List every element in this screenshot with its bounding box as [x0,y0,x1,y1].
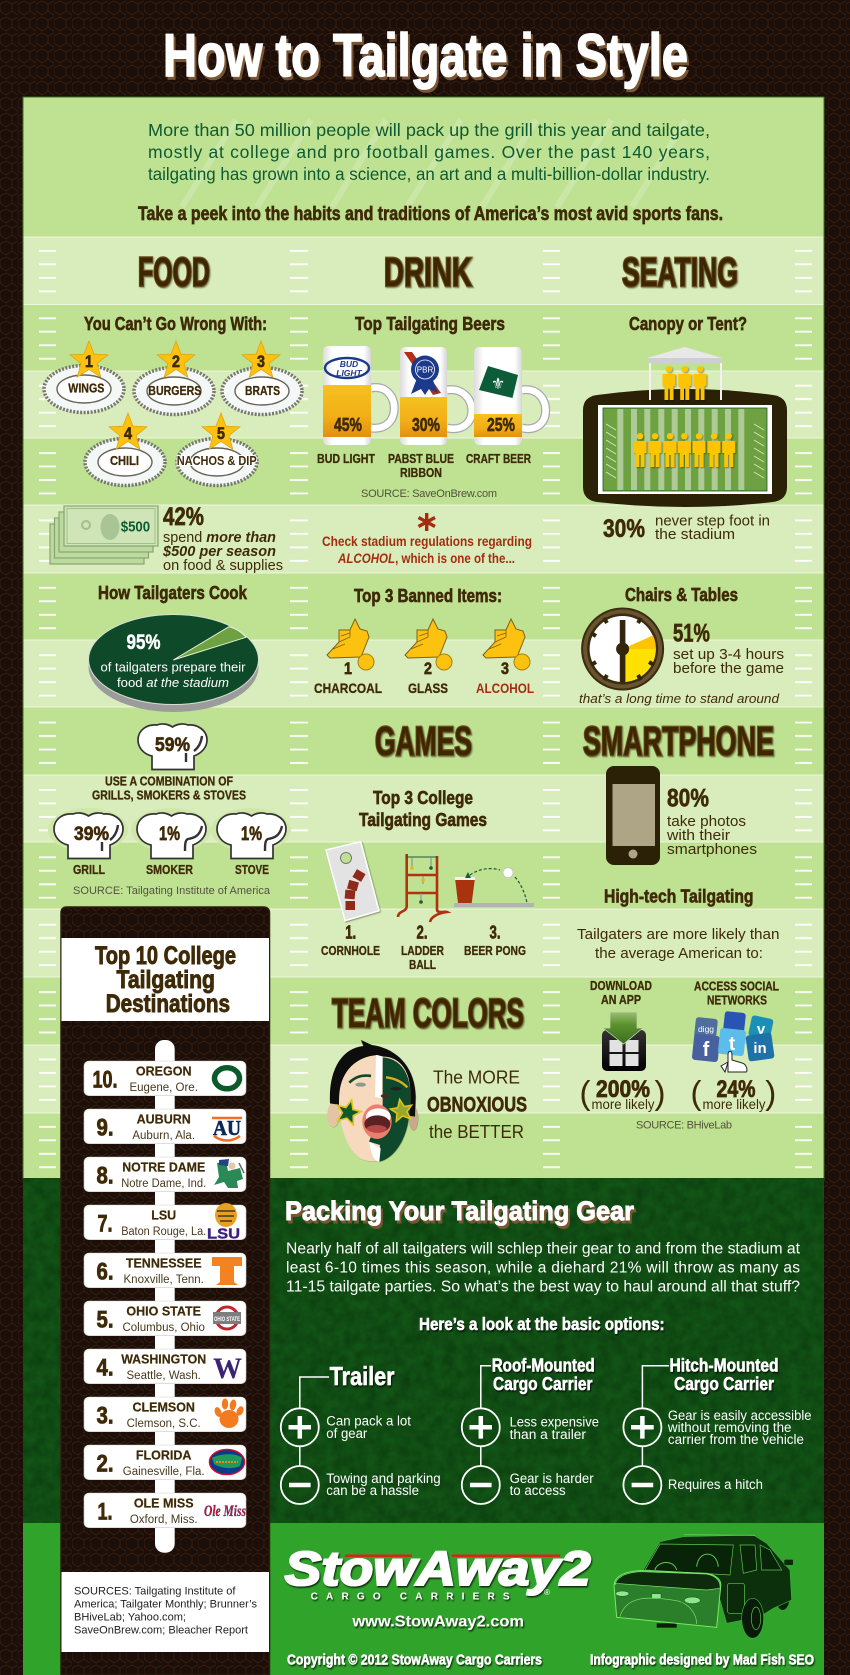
sign 6 tennessee [84,1253,246,1288]
mug 2 pabst [400,347,472,445]
mug 2 pabst: 30% [412,415,440,435]
sign 8 notre dame: NOTRE DAME [122,1161,205,1175]
option: roof-mounted cargo carrier: Roof-Mounted [492,1355,595,1376]
icons: social networks: v [757,1021,766,1038]
sign 6 tennessee: Knoxville, Tenn. [124,1274,204,1286]
item 3 alcohol: ALCOHOL [476,680,534,696]
title: How to Tailgate in Style [163,22,688,89]
sign 9 auburn [84,1109,246,1144]
subheading: Take a peek into the habits and traditions of America’s most avid sports fans. [138,204,723,225]
item 3 alcohol [476,619,534,696]
intro text: tailgating has grown into a science, an art and a multi-billion-dollar industry. [148,164,710,184]
game labels: 2. [416,922,428,942]
stat: 42 percent spend: on food & supplies [163,558,283,574]
icon: minus [462,1466,500,1504]
text: packing intro: least 6-10 times this season, while a diehard 21% will throw as many as [286,1260,800,1276]
chef hat stove: STOVE [235,862,269,877]
people in the stadium [634,433,735,467]
option: hitch-mounted cargo carrier [623,1355,812,1504]
option: trailer: of gear [326,1426,368,1441]
logo: auburn: AU [213,1116,241,1140]
logo: stowaway2 cargo carriers: StowAway2 [285,1543,591,1596]
chef hat stove: 1% [241,824,262,845]
icons: social networks: f [703,1039,710,1061]
option: hitch-mounted cargo carrier: Requires a hitch [668,1477,763,1492]
game labels [321,922,526,972]
heading: games: GAMES [375,718,472,764]
game labels: 1. [345,922,356,942]
sign 9 auburn: 9. [96,1115,114,1142]
stadium screen [583,389,787,507]
pie chart: 95 percent at the stadium: of tailgaters prepare their [100,660,246,674]
sign 5 ohio state: 5. [96,1307,114,1334]
plate 1 wings: 1 [85,352,93,371]
panel: packing gear [23,1178,824,1523]
source: beers: SOURCE: SaveOnBrew.com [361,488,497,500]
stat: access social networks [690,980,779,1112]
logo: clemson paw [213,1398,245,1428]
plate 2 burgers [134,341,214,414]
text: the more obnoxious the better: the BETTER [429,1122,524,1142]
stat: access social networks: ACCESS SOCIAL [694,980,779,994]
stat: 80 percent take photos: smartphones [667,841,757,858]
stat: 51 percent set up early: set up 3-4 hours [673,646,784,663]
sign 10 oregon: OREGON [136,1065,191,1079]
subhead: high-tech tailgating: High-tech Tailgating [604,886,754,906]
subhead: how tailgaters cook: How Tailgaters Cook [98,582,248,603]
sign 3 clemson: CLEMSON [132,1401,195,1415]
sign 1 ole miss: OLE MISS [134,1497,194,1511]
footer: copyright: Copyright © 2012 StowAway Cargo Carriers [287,1651,542,1668]
option: trailer: can be a hassle [326,1483,419,1498]
sign 7 lsu: LSU [151,1209,176,1223]
subhead: top 3 college tailgating games [359,787,487,830]
heading: team colors: TEAM COLORS [332,990,524,1036]
banned items [314,619,534,696]
stat: 51 percent set up early: before the game [673,660,784,677]
illustration: painted fan face [327,1040,418,1162]
chef hat smoker: 1% [159,824,180,845]
sign 5 ohio state: OHIO STATE [126,1305,201,1319]
stat: 51 percent set up early: that’s a long time to stand around [579,691,780,706]
option: hitch-mounted cargo carrier: Gear is easily accessible [668,1408,812,1423]
panel header: Destinations [106,990,230,1018]
text: tailgaters more likely: the average American to: [595,945,763,962]
mug 3 craft beer [474,347,546,445]
stat: 30 percent never step foot: never step foot in [655,512,770,530]
stat: 42 percent spend: $500 per season [162,544,276,560]
logo: florida gator [210,1450,244,1474]
plate 5 nachos and dip: 5 [217,424,225,443]
plate 5 nachos and dip [177,413,257,486]
sign 3 clemson: 3. [96,1403,114,1430]
mug 1 bud light: BUD [340,359,358,369]
icon: stack of cash [50,506,158,564]
plate 4 chili [85,413,165,486]
stat: 30 percent never step foot: the stadium [655,526,735,543]
stat: download an app [580,979,666,1112]
stat: access social networks: ) [765,1074,776,1111]
sources box: SOURCES: Tailgating Institute of [74,1585,236,1597]
intro text: mostly at college and pro football games. Over the past 140 years, [148,142,710,162]
logo: notre dame [214,1159,244,1188]
text: use a combination: GRILLS, SMOKERS & STOVES [92,788,246,802]
sign 4 washington [84,1349,246,1385]
sign 7 lsu [84,1203,246,1242]
stat: download an app: 200% [596,1076,650,1103]
sign 1 ole miss: 1. [98,1499,112,1526]
panel header: Top 10 College [95,942,236,970]
logo: ole miss: Ole Miss [204,1503,246,1520]
sign 8 notre dame: 8. [96,1163,114,1190]
plate 2 burgers: 2 [172,352,180,371]
plate 5 nachos and dip: NACHOS & DIP [177,454,257,468]
intro text: More than 50 million people will pack up the grill this year and tailgate, [148,120,710,140]
stat: 80 percent take photos: with their [666,827,730,844]
text: use a combination: USE A COMBINATION OF [105,774,233,788]
stat: 42 percent spend [162,503,283,574]
beer labels [317,452,531,480]
option: roof-mounted cargo carrier [462,1355,599,1504]
mug 3 craft beer: ⚜ [491,374,505,393]
logo: lsu [207,1203,240,1242]
sign 7 lsu: Baton Rouge, La. [121,1226,206,1238]
logo: washington: W [213,1352,242,1385]
sign 1 ole miss: Oxford, Miss. [130,1514,198,1526]
mug 1 bud light: LIGHT [336,368,363,378]
chef hat smoker [131,808,211,877]
stat: 42 percent spend: spend more than [163,530,276,546]
icon: plus [623,1408,661,1446]
option: roof-mounted cargo carrier: Gear is harder [510,1471,594,1486]
chef hat smoker: SMOKER [146,862,194,877]
pie chart: 95 percent at the stadium: 95% [126,631,161,654]
icons: social networks: digg [698,1024,714,1034]
sign 4 washington: Seattle, Wash. [127,1370,201,1382]
heading: drink: DRINK [384,249,472,295]
option: hitch-mounted cargo carrier: carrier from the vehicle [668,1432,804,1447]
text: the more obnoxious the better: The MORE [433,1068,520,1088]
stat: download an app: ) [654,1074,666,1111]
sources box [62,1572,269,1652]
stat: download an app: AN APP [601,993,641,1007]
option: roof-mounted cargo carrier: than a trailer [510,1427,587,1442]
stat: access social networks: ( [690,1074,702,1111]
item 2 glass [405,619,452,696]
panel header: Tailgating [116,966,215,994]
icon: minus [623,1466,661,1504]
option: hitch-mounted cargo carrier: Cargo Carrier [674,1373,774,1394]
panel: intro and football field [23,97,824,1179]
option: hitch-mounted cargo carrier: without removing the [667,1420,792,1435]
subhead: you can't go wrong with: You Can’t Go Wrong With: [84,313,267,334]
sign 4 washington: 4. [96,1355,114,1382]
text: packing intro: Nearly half of all tailgaters will schlep their gear to and from the stadium at [286,1240,801,1258]
sign 5 ohio state [84,1301,246,1336]
sign 9 auburn: AUBURN [137,1113,191,1127]
signpost pole [155,1040,175,1553]
panel: top 10 destinations [61,907,270,1675]
logo: ohio state [213,1307,241,1329]
item 1 charcoal: 1 [344,659,352,678]
text: tailgaters more likely [577,926,780,962]
icons: social networks: t [729,1034,736,1055]
option: roof-mounted cargo carrier: Cargo Carrier [493,1373,592,1394]
icon: beer pong [454,868,534,907]
option: trailer: Can pack a lot [326,1414,411,1429]
sign 8 notre dame [84,1157,246,1192]
plate 1 wings: WINGS [68,382,104,396]
sign 10 oregon: Eugene, Ore. [129,1082,198,1094]
item 2 glass: GLASS [408,680,448,696]
website url: www.StowAway2.com [351,1614,524,1631]
intro text [148,120,710,184]
plates with ranked foods [44,341,302,486]
subhead: basic options: Here’s a look at the basic options: [419,1314,665,1334]
icon: minus [281,1466,319,1504]
item 2 glass: 2 [424,659,432,678]
text: the more obnoxious the better [427,1068,527,1142]
panel header [62,938,269,1021]
icons: social networks: in [753,1040,767,1057]
chef hat stove [211,808,291,877]
sign 2 florida [84,1445,246,1480]
sign 2 florida: FLORIDA [136,1449,191,1463]
subhead: canopy or tent: Canopy or Tent? [629,313,747,334]
logo: ohio state: OHIO STATE [214,1317,240,1323]
cargo carrier [614,1571,721,1627]
stat: 80 percent take photos [666,784,757,858]
chef hat grill [48,808,128,877]
icon: plus [462,1408,500,1446]
item 1 charcoal [314,619,382,696]
subhead: top tailgating beers: Top Tailgating Beers [355,313,505,334]
logo: lsu: LSU [207,1226,240,1242]
icon: stack of cash: $500 [121,518,150,536]
stat: 80 percent take photos: 80% [667,784,709,812]
plate 1 wings [44,341,124,412]
logo: oregon [214,1068,240,1089]
icon: plus [281,1408,319,1446]
option: trailer: Towing and parking [326,1471,441,1486]
stat: download an app: ( [580,1074,590,1111]
sources box: BHiveLab; Yahoo.com; [74,1612,186,1624]
logo: tennessee [212,1257,242,1285]
text: use a combination [92,774,246,802]
plate 3 brats [222,341,302,414]
pie chart: 95 percent at the stadium [88,614,258,712]
beer labels: BUD LIGHT [317,452,375,466]
plate 4 chili: CHILI [110,454,139,468]
sign 3 clemson [84,1397,246,1432]
text: packing intro [286,1240,801,1296]
icons: social networks [692,1011,775,1072]
alcohol warning [322,513,532,566]
heading: packing your tailgating gear: Packing Your Tailgating Gear [285,1196,634,1226]
stat: 51 percent set up early [579,620,784,706]
game labels: BALL [409,958,436,972]
text: tailgaters more likely: Tailgaters are more likely than [577,926,780,943]
sign 7 lsu: 7. [98,1211,112,1238]
panel: sponsor [23,1523,824,1675]
sign 3 clemson: Clemson, S.C. [127,1418,201,1430]
source: bhivelab: SOURCE: BHiveLab [636,1120,732,1132]
icon: asterisk [418,513,435,531]
plate 2 burgers: BURGERS [148,384,201,398]
beer labels: CRAFT BEER [466,452,531,466]
pie chart: 95 percent at the stadium: food at the stadium [117,675,229,690]
sign 8 notre dame: Notre Dame, Ind. [121,1178,206,1190]
item 1 charcoal: CHARCOAL [314,680,382,696]
illustration: suv with cargo carrier [614,1535,793,1638]
alcohol warning: Check stadium regulations regarding [322,533,532,549]
sources box: SaveOnBrew.com; Bleacher Report [74,1624,249,1636]
stat: 42 percent spend: 42% [163,503,204,531]
heading: seating: SEATING [622,249,738,295]
sign 2 florida: Gainesville, Fla. [123,1466,205,1478]
sign 4 washington: WASHINGTON [121,1353,206,1367]
sign 1 ole miss [84,1493,246,1528]
sign 6 tennessee: TENNESSEE [126,1257,202,1271]
stat: 51 percent set up early: 51% [673,620,710,648]
stadium with canopy graphic [583,347,787,507]
subhead: chairs and tables: Chairs & Tables [625,584,738,605]
plate 3 brats: 3 [257,352,265,371]
logo: stowaway2 cargo carriers: ® [544,1588,550,1597]
plate 3 brats: BRATS [245,384,280,398]
logo: stowaway2 cargo carriers: CARGO CARRIERS [311,1591,510,1602]
option: roof-mounted cargo carrier: Less expensive [510,1415,599,1430]
alcohol warning: ALCOHOL, which is one of the... [337,550,515,566]
icon: download [602,1012,646,1071]
stat: access social networks: more likely [702,1097,766,1112]
option: trailer [281,1361,441,1504]
beer labels: PABST BLUE [388,452,454,466]
game labels: LADDER [401,944,444,958]
sign 10 oregon: 10. [92,1067,118,1094]
stat: 80 percent take photos: take photos [667,813,746,830]
text: packing intro: 11-15 tailgate parties. So what’s the best way to haul around all that stuff? [286,1278,800,1296]
sources box: America; Tailgater Monthly; Brunner’s [74,1598,257,1610]
game labels: BEER PONG [464,944,526,958]
game labels: 3. [490,922,500,942]
plate 4 chili: 4 [124,424,132,443]
stat: 30 percent never step foot: 30% [603,515,645,543]
subhead: top 3 banned items: Top 3 Banned Items: [354,585,502,606]
beer labels: RIBBON [400,466,442,480]
icon: ladder ball [398,854,447,922]
mug 2 pabst: PBR [417,366,433,374]
icon: cornhole board [326,842,379,921]
stat: access social networks: NETWORKS [707,994,767,1008]
sign 9 auburn: Auburn, Ala. [132,1130,195,1142]
heading: food: FOOD [138,249,210,295]
chef hat 59 percent [138,724,207,770]
sign 6 tennessee: 6. [96,1259,114,1286]
chef hat 59 percent: 59% [155,735,190,756]
chef hat grill: 39% [74,824,109,845]
text: the more obnoxious the better: OBNOXIOUS [427,1094,527,1116]
item 3 alcohol: 3 [501,659,509,678]
mug 1 bud light: 45% [334,415,362,435]
option: roof-mounted cargo carrier: to access [510,1483,566,1498]
subhead: top 3 college tailgating games: Top 3 College [373,787,473,808]
stat: 30 percent never step foot [603,512,770,543]
tent [647,347,722,363]
sign 10 oregon [84,1061,246,1096]
mug 3 craft beer: 25% [487,415,515,435]
stat: access social networks: 24% [716,1076,756,1103]
sign 2 florida: 2. [96,1451,114,1478]
subhead: top 3 college tailgating games: Tailgating Games [359,809,487,830]
sign 5 ohio state: Columbus, Ohio [122,1322,205,1334]
chef hat grill: GRILL [73,862,105,877]
icon: smartphone [606,766,660,865]
option: hitch-mounted cargo carrier: Hitch-Mounted [670,1355,778,1376]
icon: clock [581,608,664,690]
mug 1 bud light [323,346,394,445]
stat: download an app: more likely [592,1097,655,1112]
source: tailgating institute: SOURCE: Tailgating Institute of America [73,885,271,897]
stat: download an app: DOWNLOAD [590,979,652,993]
game labels: CORNHOLE [321,944,380,958]
people under the tent [662,366,706,400]
option: trailer: Trailer [330,1361,395,1391]
beer mugs [323,346,546,445]
